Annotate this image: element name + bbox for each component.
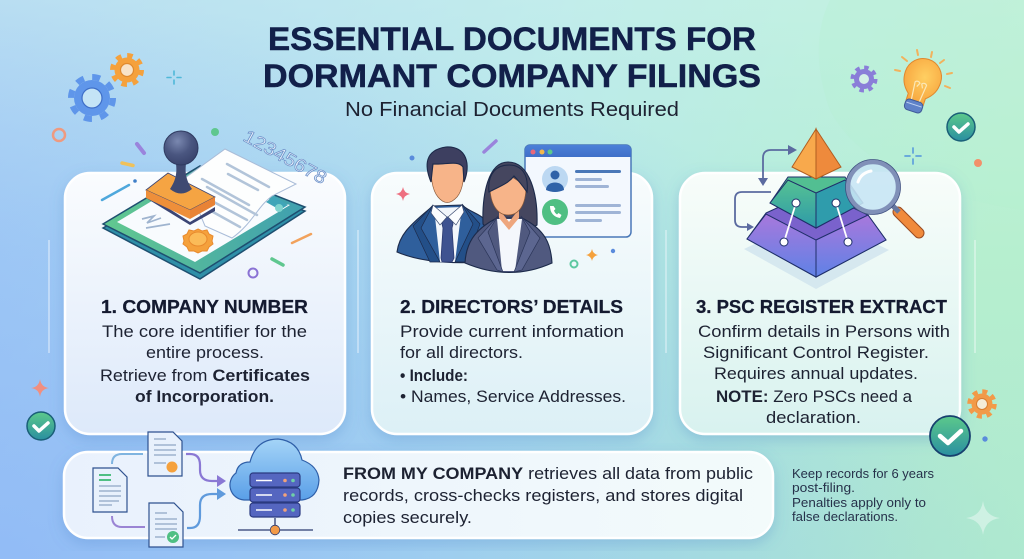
text: directors' details description: • Names, Service Addresses.	[400, 388, 626, 406]
illustration: female director	[465, 162, 552, 272]
panel: company number	[65, 173, 345, 434]
decorative icons: top right	[852, 50, 982, 167]
side note: post-filing.	[792, 481, 855, 495]
text: PSC register description: NOTE: Zero PSCs need a	[716, 388, 913, 406]
text: PSC register description	[698, 323, 950, 427]
decorative icons: left side	[27, 379, 55, 440]
panel: directors' details	[372, 173, 652, 434]
heading: directors' details: 2. DIRECTORS’ DETAILS	[400, 296, 623, 317]
panel: From My Company	[64, 452, 773, 538]
panel: PSC register extract	[680, 173, 960, 434]
side note: Penalties apply only to	[792, 496, 926, 510]
illustration: contact card window	[525, 145, 631, 237]
heading: PSC register extract: 3. PSC REGISTER EXTRACT	[696, 296, 948, 317]
heading: company number: 1. COMPANY NUMBER	[101, 296, 308, 317]
illustration: male director	[397, 147, 484, 263]
text: company number description	[100, 323, 310, 406]
text: From My Company summary: FROM MY COMPANY retrieves all data from public	[343, 465, 753, 483]
text: PSC register description: Requires annual updates.	[714, 365, 918, 383]
illustration: pyramid and magnifier	[735, 129, 919, 289]
illustration: stamp and certificate	[103, 126, 330, 279]
title: ESSENTIAL DOCUMENTS FOR	[268, 21, 756, 57]
decorative icons: top left	[53, 56, 219, 166]
text: PSC register description: declaration.	[766, 409, 861, 427]
decorative marks: around directors	[396, 141, 615, 268]
text: company number description: Retrieve from Certificates	[100, 367, 310, 385]
text: company number description: entire process.	[146, 344, 264, 362]
text: directors' details description: for all directors.	[400, 344, 523, 362]
text: From My Company summary	[343, 465, 753, 527]
title: DORMANT COMPANY FILINGS	[263, 58, 761, 94]
decorative icons: right side	[930, 392, 1000, 535]
text: company number description: The core identifier for the	[102, 323, 307, 341]
text: From My Company summary: records, cross-checks registers, and stores digital	[343, 487, 743, 505]
number label: 12345678	[240, 126, 330, 188]
text: PSC register description: Significant Control Register.	[703, 344, 929, 362]
text: company number description: of Incorporation.	[135, 388, 274, 406]
text: PSC register description: Confirm details in Persons with	[698, 323, 950, 341]
text: directors' details description: • Include:	[400, 367, 468, 385]
flow diagram: documents to cloud	[93, 432, 319, 547]
side note: false declarations.	[792, 510, 898, 524]
subtitle: No Financial Documents Required	[345, 99, 679, 121]
title	[263, 21, 761, 94]
side note	[792, 467, 934, 524]
icon: light bulb	[894, 50, 952, 117]
text: directors' details description: Provide current information	[400, 323, 624, 341]
side note: Keep records for 6 years	[792, 467, 934, 481]
decorative marks: around stamp	[102, 179, 311, 278]
text: directors' details description	[400, 323, 626, 406]
text: From My Company summary: copies securely.	[343, 509, 472, 527]
